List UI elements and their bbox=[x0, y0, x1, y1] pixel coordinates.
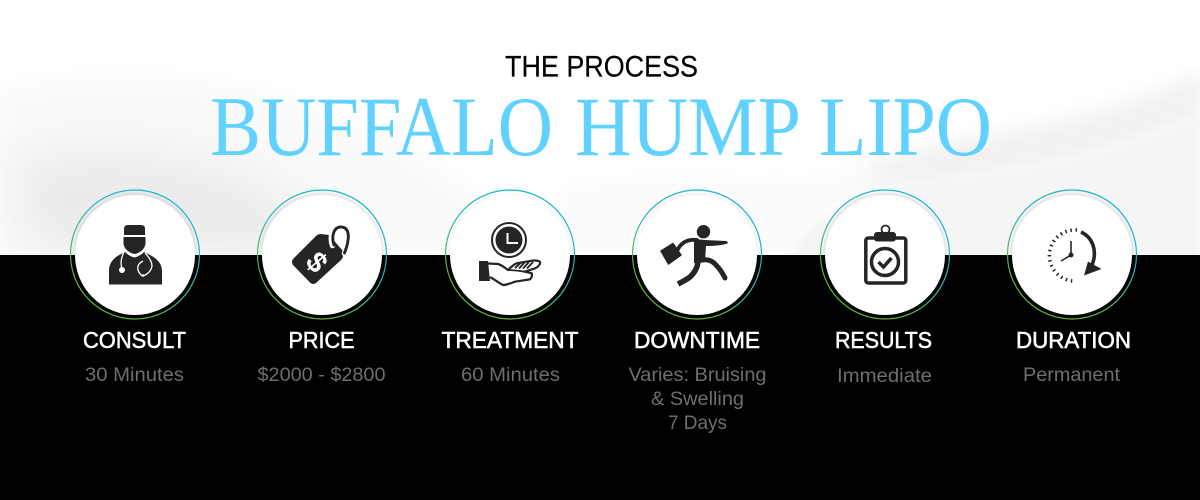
value: downtime details: 7 Days bbox=[668, 412, 727, 434]
title: Buffalo Hump Lipo: BUFFALO bbox=[210, 80, 553, 174]
value: permanent: Permanent bbox=[1023, 364, 1121, 386]
icon: doctor bbox=[109, 225, 162, 284]
label: consult: CONSULT bbox=[83, 327, 186, 353]
title: Buffalo Hump Lipo: HUMP bbox=[575, 80, 801, 174]
icon: price tag bbox=[292, 227, 348, 284]
icon: clock over hand bbox=[479, 223, 540, 285]
title: Buffalo Hump Lipo: LIPO bbox=[819, 80, 992, 174]
value: 60 minutes: 60 Minutes bbox=[461, 364, 560, 386]
step: consult bbox=[70, 190, 200, 386]
title: Buffalo Hump Lipo bbox=[210, 80, 992, 174]
value: immediate: Immediate bbox=[837, 365, 932, 387]
downtime circle bbox=[632, 190, 762, 319]
step: duration bbox=[1008, 190, 1136, 386]
value: downtime details: & Swelling bbox=[651, 388, 744, 410]
icon: clipboard with check bbox=[866, 226, 906, 283]
label: price: PRICE bbox=[288, 327, 354, 353]
black lower band bbox=[0, 255, 1200, 500]
icon: running businessman bbox=[661, 225, 728, 284]
background: white and grey swoosh upper area bbox=[0, 0, 1200, 256]
label: downtime: DOWNTIME bbox=[634, 327, 760, 353]
step: price bbox=[258, 190, 386, 386]
duration circle bbox=[1008, 190, 1136, 319]
heading: The Process: THE PROCESS bbox=[505, 50, 698, 84]
price circle bbox=[258, 190, 386, 319]
step: treatment bbox=[442, 190, 578, 386]
label: treatment: TREATMENT bbox=[442, 327, 578, 353]
treatment circle bbox=[446, 190, 574, 319]
icon: price tag: $ bbox=[299, 246, 334, 279]
step: results bbox=[820, 190, 950, 387]
label: results: RESULTS bbox=[835, 327, 932, 353]
value: downtime details: Varies: Bruising bbox=[628, 364, 766, 386]
label: duration: DURATION bbox=[1016, 327, 1131, 353]
value: 30 minutes: 30 Minutes bbox=[85, 364, 184, 386]
icon: clock with arrow bbox=[1049, 230, 1102, 281]
step: downtime bbox=[628, 190, 766, 434]
consult circle bbox=[70, 190, 200, 319]
value: downtime details bbox=[628, 364, 766, 434]
value: price range: $2000 - $2800 bbox=[258, 364, 386, 386]
results circle bbox=[820, 190, 950, 319]
